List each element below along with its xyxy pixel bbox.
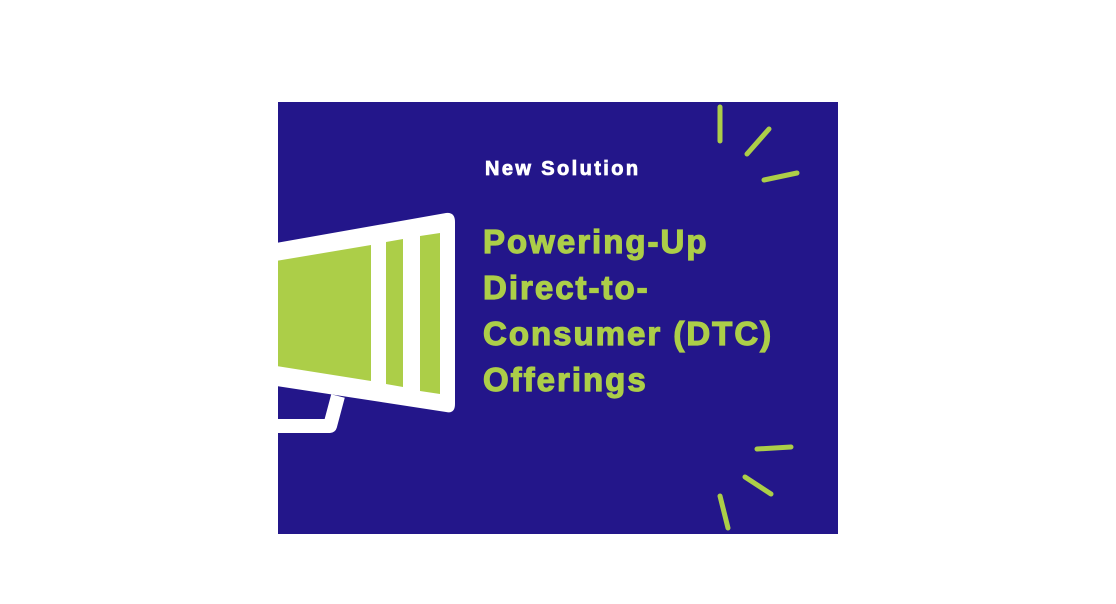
title <box>483 223 773 399</box>
title: Direct-to- <box>483 269 650 306</box>
subtitle: New Solution <box>485 158 640 180</box>
title: Consumer (DTC) <box>483 315 773 352</box>
panel: banner <box>278 102 838 534</box>
title: Offerings <box>483 361 648 398</box>
title: Powering-Up <box>483 223 708 260</box>
decorative burst lines <box>718 104 800 530</box>
icon: megaphone <box>278 212 455 433</box>
